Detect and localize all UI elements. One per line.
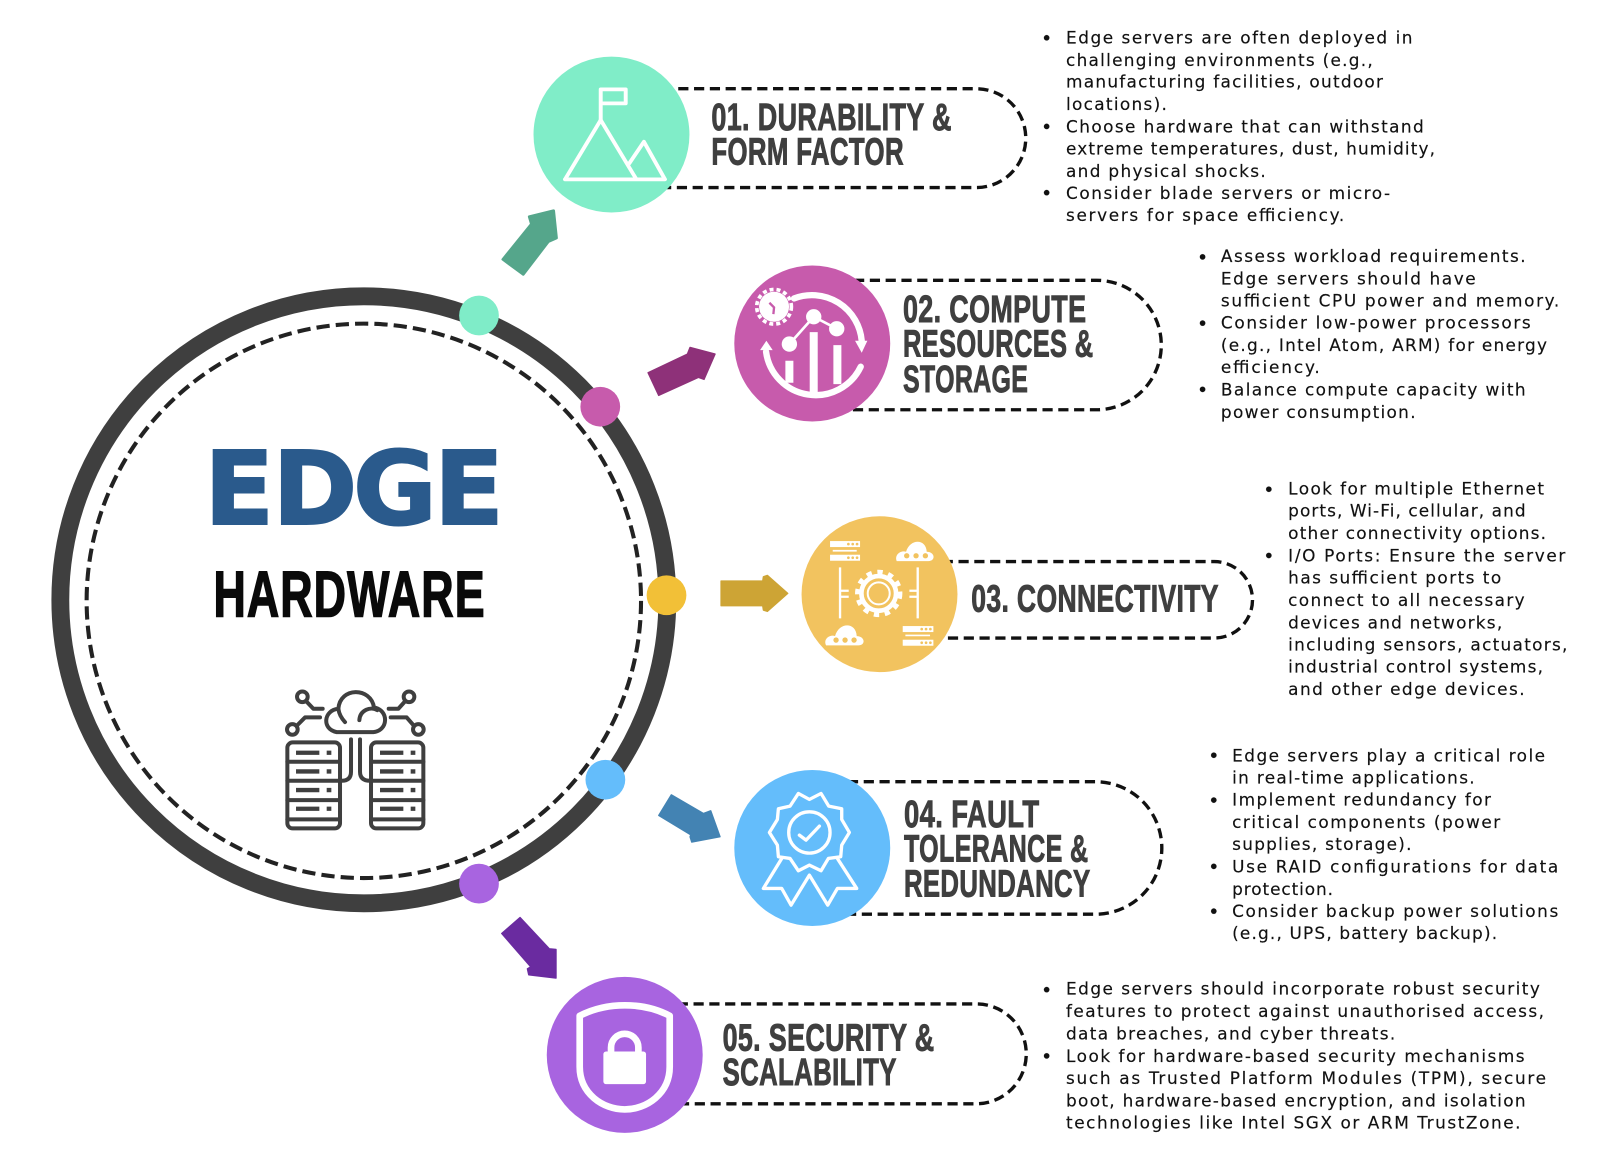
text block 03: has sufficient ports to bbox=[1288, 568, 1501, 588]
icon: analytics cycle bbox=[734, 266, 890, 421]
text block 01 bbox=[1044, 27, 1435, 225]
heading 05: SCALABILITY bbox=[723, 1051, 897, 1093]
text block 04: critical components (power bbox=[1232, 812, 1500, 832]
central hub circle bbox=[60, 296, 667, 903]
icon: network gear bbox=[802, 516, 957, 672]
panel: 01 durability bbox=[534, 27, 1435, 225]
text block 01: Edge servers are often deployed in bbox=[1066, 27, 1413, 47]
text block 05: technologies like Intel SGX or ARM TrustZone. bbox=[1066, 1113, 1521, 1133]
panel: 05 security bbox=[547, 977, 1546, 1133]
capsule outline bbox=[678, 1004, 1026, 1104]
panel: 04 fault tolerance bbox=[734, 745, 1558, 943]
text block 02: Assess workload requirements. bbox=[1221, 246, 1526, 266]
heading 02: STORAGE bbox=[903, 358, 1028, 400]
text block 03: Look for multiple Ethernet bbox=[1288, 478, 1544, 498]
heading 03: 03. CONNECTIVITY bbox=[971, 578, 1219, 620]
text block 01: challenging environments (e.g., bbox=[1066, 50, 1373, 70]
capsule outline bbox=[662, 89, 1026, 188]
arrow 3 bbox=[721, 575, 788, 611]
capsule outline bbox=[848, 782, 1162, 914]
capsule outline bbox=[943, 562, 1253, 638]
text block 01: and physical shocks. bbox=[1066, 161, 1266, 181]
node: magenta bbox=[580, 387, 620, 427]
title: EDGE HARDWARE bbox=[204, 430, 504, 631]
text block 02: Consider low-power processors bbox=[1221, 313, 1531, 333]
panel: 02 compute bbox=[734, 246, 1559, 422]
node: yellow bbox=[647, 575, 686, 615]
text block 05 bbox=[1044, 979, 1546, 1133]
text block 03: devices and networks, bbox=[1288, 612, 1502, 632]
text block 03: I/O Ports: Ensure the server bbox=[1288, 546, 1565, 566]
text block 05: features to protect against unauthorised access, bbox=[1066, 1001, 1544, 1021]
text block 05: boot, hardware-based encryption, and isolation bbox=[1066, 1090, 1526, 1110]
arrow 5 bbox=[502, 917, 556, 978]
text block 02: (e.g., Intel Atom, ARM) for energy bbox=[1221, 335, 1547, 355]
panel: 03 connectivity bbox=[802, 478, 1567, 699]
text block 03 bbox=[1266, 478, 1567, 699]
text block 03: industrial control systems, bbox=[1288, 657, 1543, 677]
text block 02: efficiency. bbox=[1221, 357, 1320, 377]
text block 03: ports, Wi-Fi, cellular, and bbox=[1288, 501, 1526, 521]
text block 03: connect to all necessary bbox=[1288, 590, 1525, 610]
heading 01 bbox=[711, 96, 952, 173]
text block 02: sufficient CPU power and memory. bbox=[1221, 290, 1559, 310]
text block 01: Choose hardware that can withstand bbox=[1066, 117, 1424, 137]
text block 04: Edge servers play a critical role bbox=[1232, 745, 1545, 765]
node: purple bbox=[459, 864, 499, 904]
heading 02: 02. COMPUTE bbox=[903, 288, 1086, 330]
text block 02: power consumption. bbox=[1221, 402, 1416, 422]
icon: shield lock bbox=[547, 977, 703, 1133]
heading 02: RESOURCES & bbox=[903, 323, 1094, 365]
text block 01: locations). bbox=[1066, 94, 1167, 114]
icon: cloud servers bbox=[287, 691, 424, 828]
arrow 1 bbox=[503, 211, 556, 274]
heading: HARDWARE: HARDWARE bbox=[214, 558, 486, 631]
text block 03: and other edge devices. bbox=[1288, 679, 1525, 699]
text block 01: servers for space efficiency. bbox=[1066, 205, 1344, 225]
text block 04: (e.g., UPS, battery backup). bbox=[1232, 923, 1497, 943]
text block 04: in real-time applications. bbox=[1232, 767, 1475, 787]
text block 05: data breaches, and cyber threats. bbox=[1066, 1024, 1395, 1044]
text block 05: such as Trusted Platform Modules (TPM), secure bbox=[1066, 1068, 1546, 1088]
heading 01: 01. DURABILITY & bbox=[711, 96, 952, 138]
text block 05: Edge servers should incorporate robust security bbox=[1066, 979, 1540, 999]
arrow 2 bbox=[648, 347, 715, 395]
text block 04: Use RAID configurations for data bbox=[1232, 856, 1558, 876]
text block 01: extreme temperatures, dust, humidity, bbox=[1066, 138, 1435, 158]
heading 02 bbox=[903, 288, 1094, 400]
capsule outline bbox=[846, 280, 1161, 410]
heading 01: FORM FACTOR bbox=[711, 131, 904, 173]
icon: award badge bbox=[734, 770, 890, 926]
text block 03: other connectivity options. bbox=[1288, 523, 1546, 543]
text block 02 bbox=[1200, 246, 1559, 422]
heading 05: 05. SECURITY & bbox=[723, 1016, 935, 1058]
heading 04: TOLERANCE & bbox=[904, 828, 1088, 870]
text block 02: Edge servers should have bbox=[1221, 268, 1476, 288]
heading 05 bbox=[723, 1016, 935, 1093]
arrow 4 bbox=[659, 795, 720, 842]
text block 04: Consider backup power solutions bbox=[1232, 901, 1558, 921]
text block 04: Implement redundancy for bbox=[1232, 790, 1491, 810]
icon: mountain flag bbox=[534, 57, 689, 213]
text block 03: including sensors, actuators, bbox=[1288, 634, 1567, 654]
text block 05: Look for hardware-based security mechanisms bbox=[1066, 1046, 1525, 1066]
text block 02: Balance compute capacity with bbox=[1221, 379, 1526, 399]
text block 01: manufacturing facilities, outdoor bbox=[1066, 72, 1383, 92]
text block 01: Consider blade servers or micro- bbox=[1066, 183, 1390, 203]
heading: EDGE: EDGE bbox=[204, 430, 504, 549]
node: blue bbox=[585, 760, 625, 800]
text block 04: supplies, storage). bbox=[1232, 834, 1411, 854]
heading 04: REDUNDANCY bbox=[904, 862, 1090, 904]
node: green bbox=[459, 296, 499, 335]
heading 04 bbox=[904, 793, 1090, 904]
heading 04: 04. FAULT bbox=[904, 793, 1040, 835]
text block 04 bbox=[1211, 745, 1558, 943]
text block 04: protection. bbox=[1232, 879, 1333, 899]
